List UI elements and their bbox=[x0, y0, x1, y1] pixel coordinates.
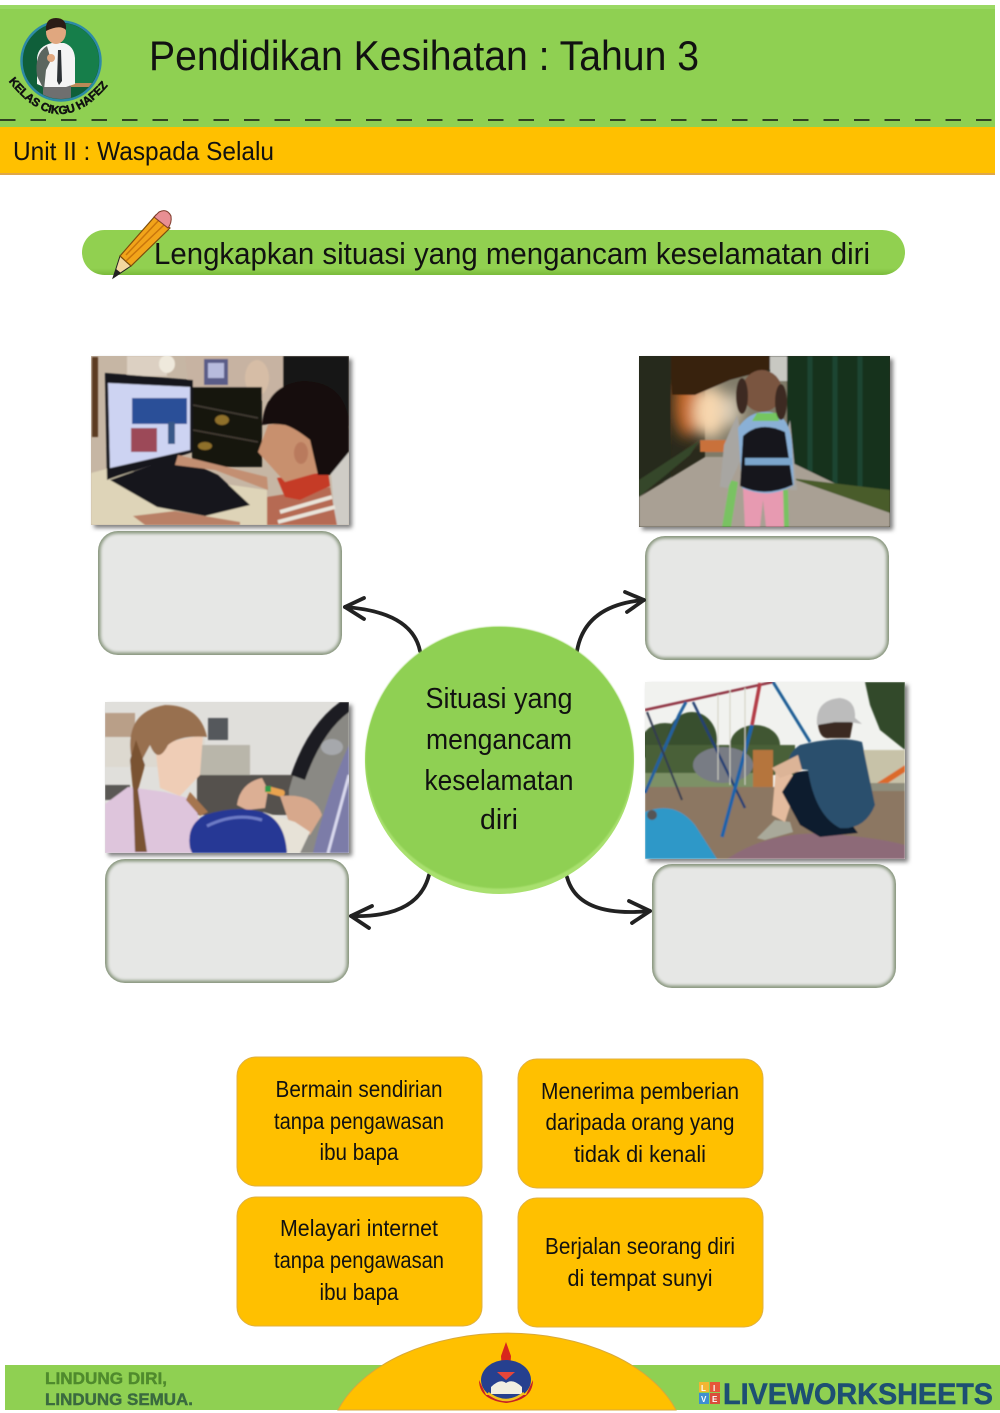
option card: Melayari internet: tanpa pengawasan bbox=[274, 1247, 444, 1273]
crest emblem bbox=[479, 1342, 533, 1403]
footer dome bbox=[338, 1333, 676, 1410]
liveworksheets logo: L bbox=[701, 1384, 706, 1393]
option card: Bermain sendirian: ibu bapa bbox=[320, 1139, 399, 1165]
arrow: centre to top left box bbox=[345, 598, 420, 651]
circle text: mengancam bbox=[426, 724, 572, 756]
option card: Bermain sendirian: tanpa pengawasan bbox=[274, 1108, 444, 1134]
answer box: bottom right bbox=[652, 864, 896, 988]
logo: Kelas Cikgu Hafez bbox=[8, 18, 108, 114]
circle text: Situasi yang bbox=[426, 683, 572, 715]
title: Pendidikan Kesihatan : Tahun 3 bbox=[149, 32, 699, 79]
footer slogan bbox=[45, 1369, 193, 1409]
answer box: top right bbox=[645, 536, 889, 660]
footer band bbox=[5, 1365, 1000, 1410]
answer box: top left bbox=[98, 531, 342, 655]
icon: pencil bbox=[113, 211, 171, 278]
unit label: Unit II : Waspada Selalu bbox=[13, 136, 274, 166]
unit strip bbox=[0, 127, 995, 175]
option card: Menerima pemberian bbox=[518, 1059, 763, 1188]
photo: boy at laptop bbox=[91, 355, 349, 525]
liveworksheets logo: I bbox=[713, 1384, 715, 1393]
footer slogan: LINDUNG SEMUA. bbox=[45, 1390, 193, 1409]
option card: Berjalan seorang diri: Berjalan seorang diri bbox=[545, 1233, 735, 1259]
liveworksheets logo: E bbox=[712, 1395, 718, 1404]
option card: Melayari internet: Melayari internet bbox=[280, 1215, 439, 1241]
option card: Menerima pemberian: daripada orang yang bbox=[546, 1109, 734, 1135]
instruction banner bbox=[82, 211, 905, 278]
photo: girl with backpack bbox=[639, 356, 890, 527]
circle text: keselamatan bbox=[424, 765, 574, 797]
option card: Bermain sendirian: Bermain sendirian bbox=[276, 1076, 442, 1102]
circle text bbox=[424, 683, 574, 836]
photo: boy alone at playground bbox=[640, 682, 905, 859]
circle text: diri bbox=[480, 804, 518, 836]
option card: Melayari internet bbox=[237, 1197, 482, 1326]
arrow: centre to top right box bbox=[577, 592, 644, 651]
instruction text: Lengkapkan situasi yang mengancam keselamatan diri bbox=[154, 236, 870, 271]
header band bbox=[0, 5, 995, 127]
liveworksheets logo: V bbox=[701, 1395, 707, 1404]
option card: Berjalan seorang diri bbox=[518, 1198, 763, 1327]
central circle bbox=[365, 626, 634, 894]
option card: Menerima pemberian: Menerima pemberian bbox=[541, 1078, 739, 1104]
arrow: centre to bottom left box bbox=[351, 875, 429, 928]
photo: girl offered sweet from car bbox=[105, 702, 349, 853]
option card: Menerima pemberian: tidak di kenali bbox=[574, 1141, 706, 1167]
option card: Melayari internet: ibu bapa bbox=[320, 1279, 399, 1305]
option card: Bermain sendirian bbox=[237, 1057, 482, 1186]
logo: Kelas Cikgu Hafez: KELAS CIKGU HAFEZ bbox=[8, 76, 108, 114]
footer slogan: LINDUNG DIRI, bbox=[45, 1369, 167, 1388]
option card: Berjalan seorang diri: di tempat sunyi bbox=[568, 1265, 712, 1291]
arrow: centre to bottom right box bbox=[567, 877, 650, 923]
answer box: bottom left bbox=[105, 859, 349, 983]
liveworksheets logo: LIVEWORKSHEETS bbox=[723, 1378, 993, 1411]
